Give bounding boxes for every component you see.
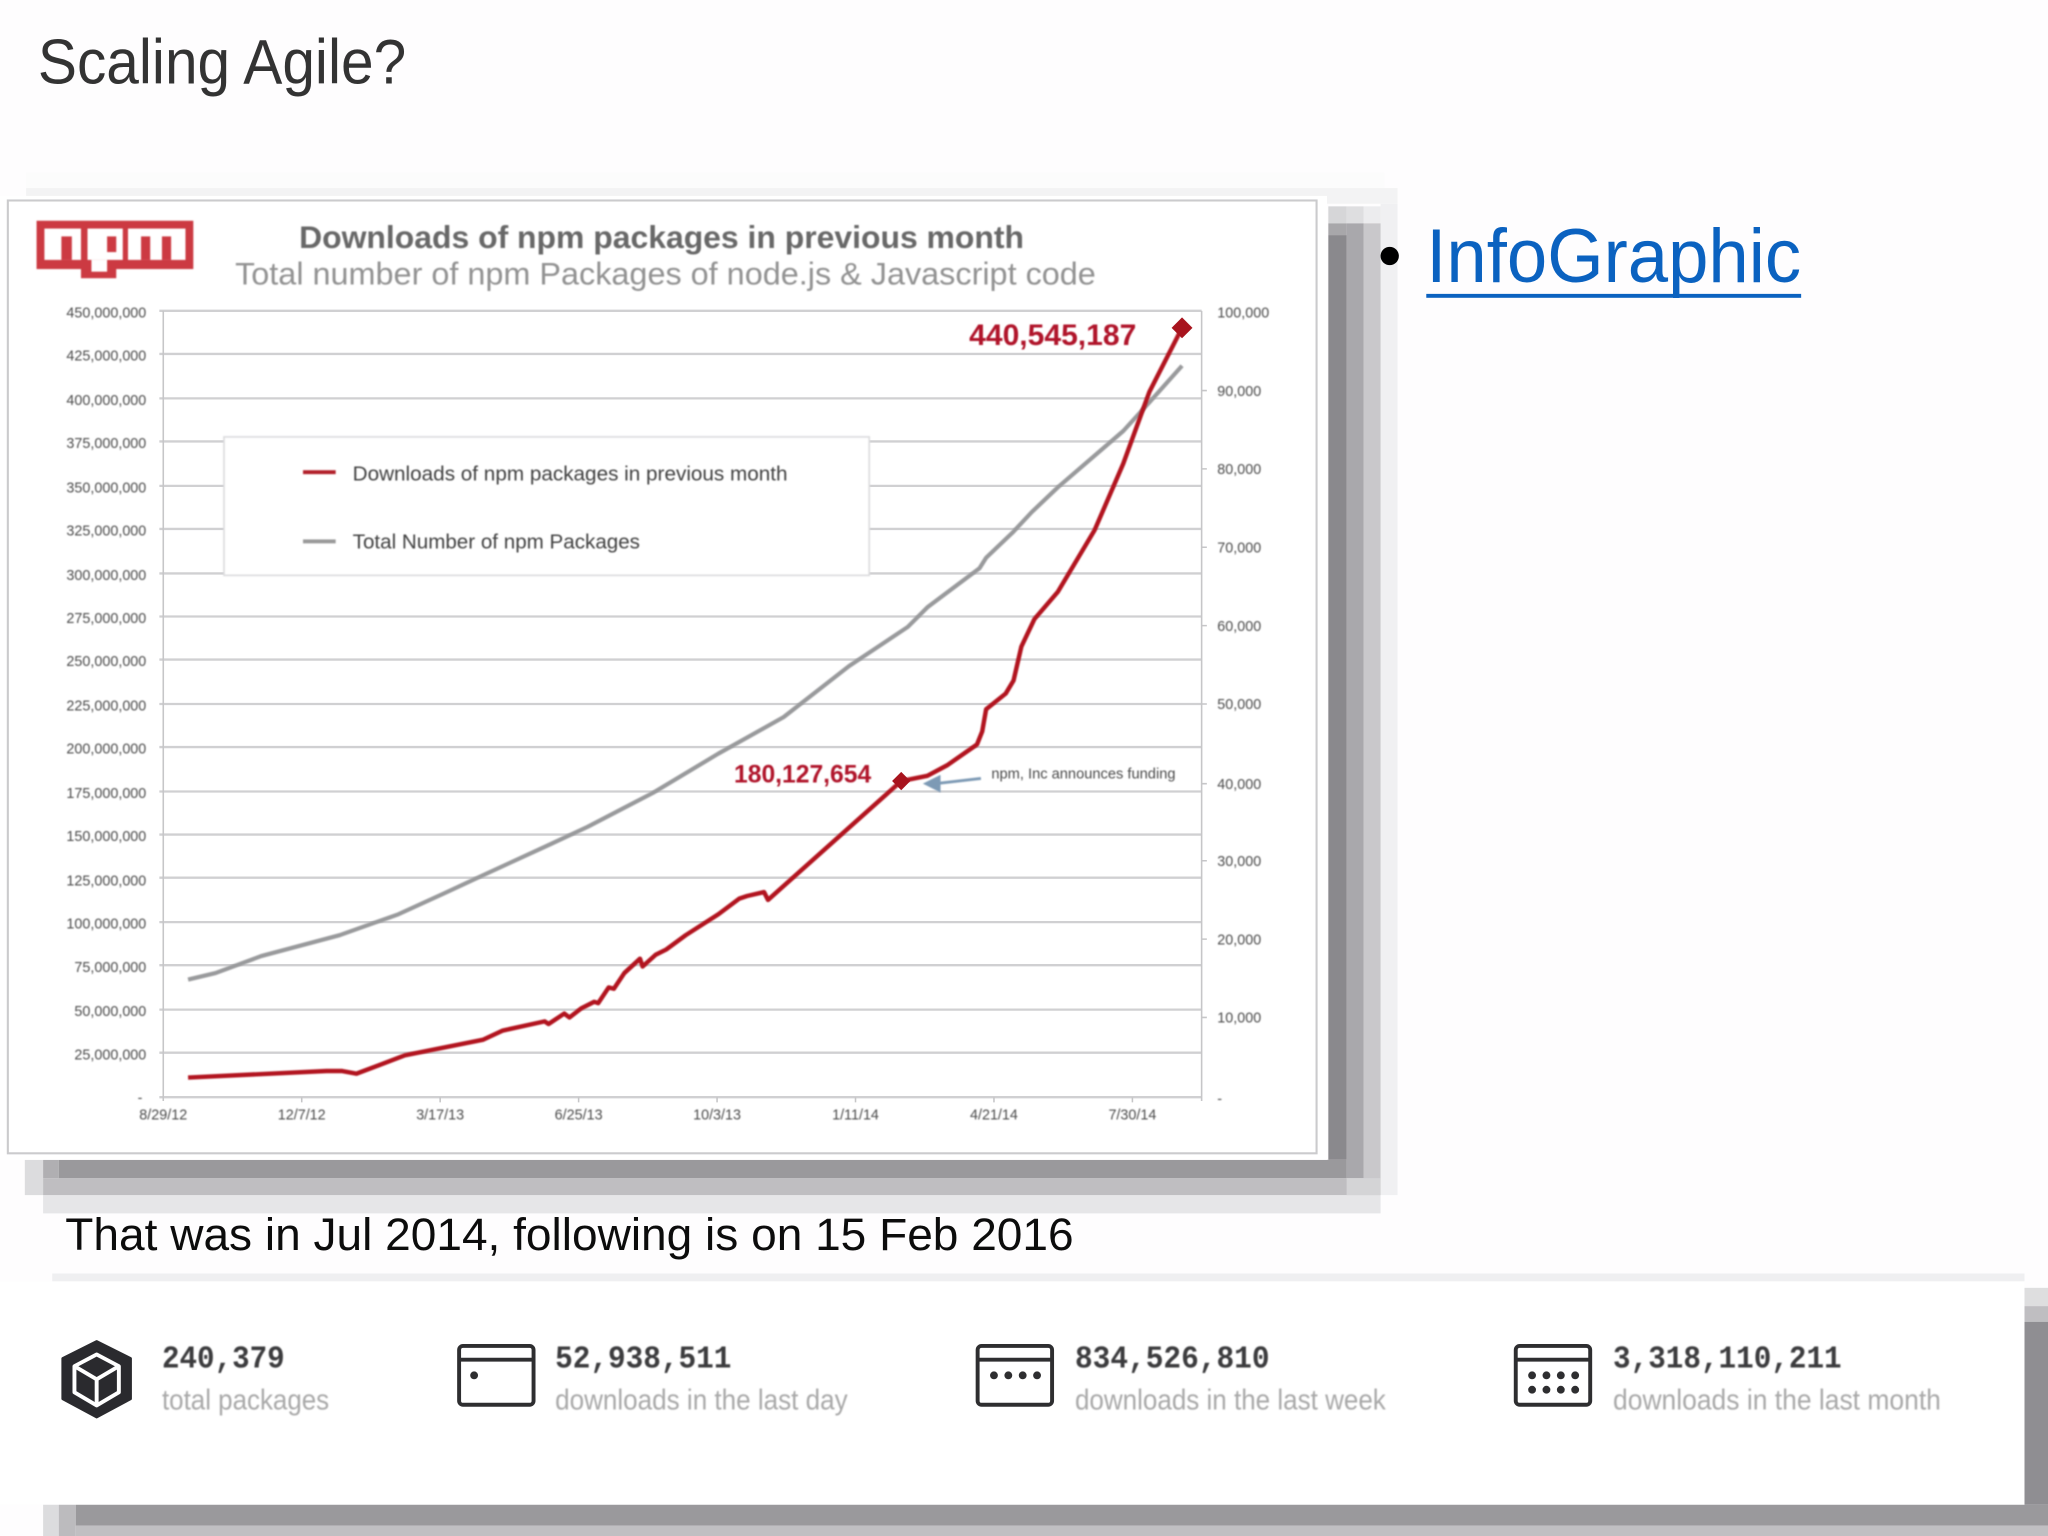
value label: 180,127,654: 180,127,654: [734, 761, 871, 788]
right axis labels: 70,000: [1217, 540, 1261, 556]
left axis labels: 375,000,000: [66, 436, 146, 452]
right axis labels: -: [1217, 1092, 1222, 1108]
link: InfoGraphic: InfoGraphic: [1426, 214, 1801, 299]
icon: calendar month: [1515, 1346, 1591, 1405]
date axis labels: 3/17/13: [416, 1107, 464, 1123]
date axis labels: [139, 1107, 1156, 1123]
npm logo: [37, 221, 193, 278]
left axis labels: 325,000,000: [66, 524, 146, 540]
right axis labels: 80,000: [1217, 462, 1261, 478]
date axis labels: 6/25/13: [555, 1107, 603, 1123]
chart subheading: Total number of npm Packages of node.js & Javascript code: [235, 257, 1096, 292]
left axis labels: 450,000,000: [66, 305, 146, 321]
left axis labels: [66, 305, 146, 1106]
right axis labels: 90,000: [1217, 384, 1261, 400]
left axis labels: 350,000,000: [66, 480, 146, 496]
stat: total packages: total packages: [162, 1384, 329, 1416]
icon: package hexagon: [63, 1341, 131, 1417]
stat: total packages: 240,379: [162, 1343, 285, 1378]
right axis labels: 10,000: [1217, 1011, 1261, 1027]
left axis labels: 75,000,000: [74, 960, 146, 976]
arrow: funding annotation: [926, 777, 981, 790]
stat: last day: 52,938,511: [555, 1343, 731, 1378]
icon: calendar week: [977, 1346, 1052, 1405]
right axis labels: 30,000: [1217, 854, 1261, 870]
left axis labels: 225,000,000: [66, 699, 146, 715]
left axis labels: -: [138, 1090, 143, 1106]
chart heading: Downloads of npm packages in previous month: [299, 220, 1024, 255]
downloads line: [188, 328, 1182, 1078]
left axis labels: 425,000,000: [66, 348, 146, 364]
stat: total packages: [162, 1343, 329, 1416]
stat: last day: [555, 1343, 848, 1416]
marker: funding point: [892, 772, 910, 790]
legend: Total Number of npm Packages: [353, 532, 640, 554]
legend: Downloads of npm packages in previous month: [353, 464, 788, 486]
chart drop shadow: [25, 172, 1398, 1213]
date axis labels: 8/29/12: [139, 1107, 187, 1123]
date axis labels: 12/7/12: [278, 1107, 326, 1123]
caption: That was in Jul 2014, following is on 15 Feb 2016: [65, 1209, 1074, 1260]
date axis labels: 7/30/14: [1108, 1107, 1156, 1123]
title: Scaling Agile?: [38, 28, 406, 98]
date axis labels: 4/21/14: [970, 1107, 1018, 1123]
legend: [224, 437, 869, 575]
stat: last day: downloads in the last day: [555, 1384, 848, 1416]
left axis labels: 125,000,000: [66, 874, 146, 890]
panel: npm downloads chart: [0, 196, 1327, 1160]
left axis labels: 250,000,000: [66, 654, 146, 670]
left axis labels: 300,000,000: [66, 568, 146, 584]
left axis labels: 25,000,000: [74, 1047, 146, 1063]
stat: last week: [1075, 1343, 1386, 1416]
left axis labels: 175,000,000: [66, 786, 146, 802]
date axis labels: 1/11/14: [832, 1107, 879, 1123]
left axis labels: 400,000,000: [66, 393, 146, 409]
stat: last week: downloads in the last week: [1075, 1384, 1386, 1416]
date axis labels: 10/3/13: [693, 1107, 741, 1123]
right axis labels: 60,000: [1217, 619, 1261, 635]
stat: last week: 834,526,810: [1075, 1343, 1270, 1378]
left axis labels: 150,000,000: [66, 829, 146, 845]
bullet: [1381, 247, 1399, 265]
right axis labels: [1217, 305, 1269, 1108]
total packages line: [188, 366, 1182, 980]
stats panel drop shadow: [43, 1273, 2048, 1536]
stat: last month: downloads in the last month: [1613, 1384, 1941, 1416]
marker: latest value: [1172, 317, 1192, 338]
right axis labels: 100,000: [1217, 305, 1269, 321]
right axis labels: 20,000: [1217, 932, 1261, 948]
left axis labels: 200,000,000: [66, 742, 146, 758]
annotation text: npm, Inc announces funding: [991, 765, 1176, 782]
left axis labels: 50,000,000: [74, 1004, 146, 1020]
stat: last month: [1613, 1343, 1941, 1416]
icon: calendar day: [458, 1346, 534, 1405]
stat: last month: 3,318,110,211: [1613, 1343, 1842, 1378]
right axis labels: 50,000: [1217, 697, 1261, 713]
left axis labels: 100,000,000: [66, 917, 146, 933]
left axis labels: 275,000,000: [66, 611, 146, 627]
right axis labels: 40,000: [1217, 777, 1261, 793]
panel: npm stats: [0, 1281, 2024, 1505]
value label: 440,545,187: 440,545,187: [969, 319, 1136, 352]
